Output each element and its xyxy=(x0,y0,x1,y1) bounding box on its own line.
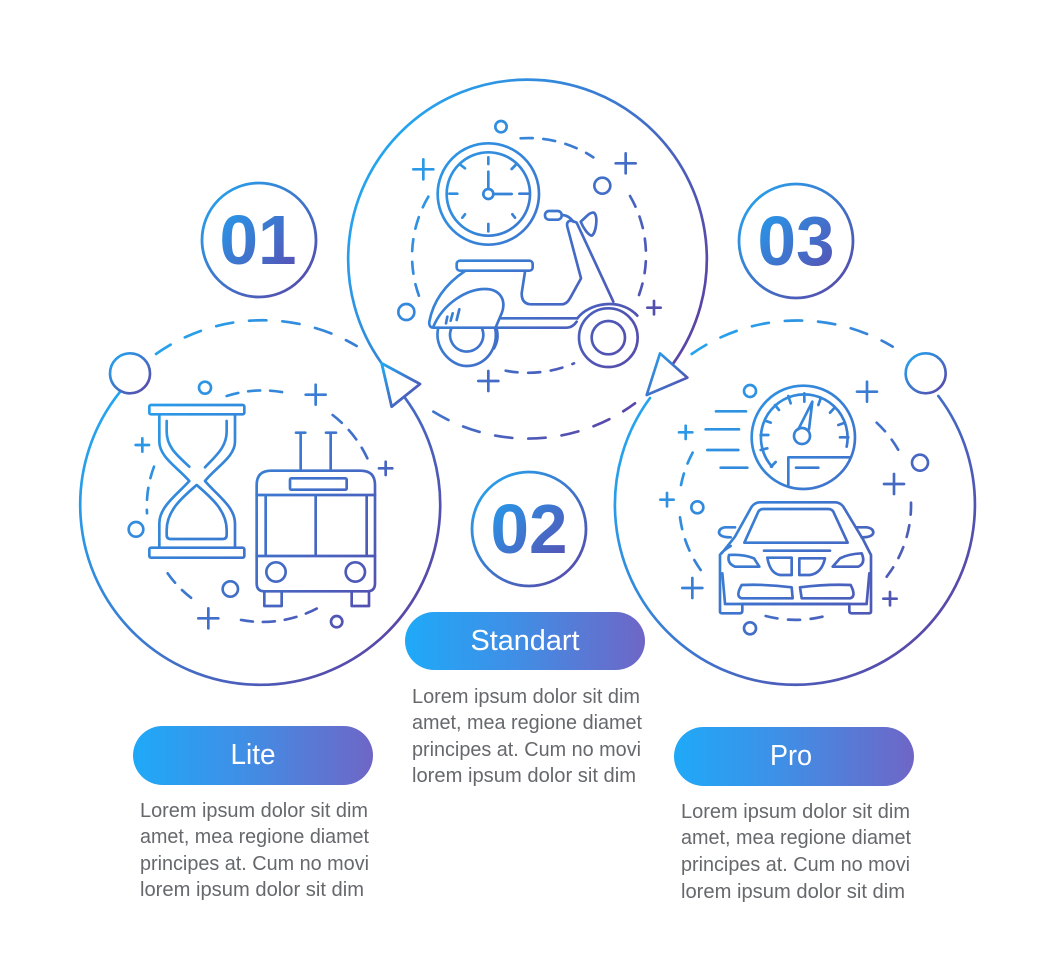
text block: standart: amet, mea regione diamet xyxy=(412,711,642,734)
pill: standart xyxy=(405,612,645,670)
dashed orbit arc xyxy=(692,321,893,354)
icon: trolleybus xyxy=(257,433,375,606)
pill: standart: Standart xyxy=(470,625,580,657)
pill: lite: Lite xyxy=(230,739,276,771)
number badge 01 xyxy=(202,183,316,297)
ring with gap xyxy=(80,392,440,685)
number badge 02 xyxy=(472,472,586,586)
text block: standart: lorem ipsum dolor sit dim xyxy=(412,764,636,787)
text block: lite: Lorem ipsum dolor sit dim xyxy=(140,799,368,822)
inner dashes xyxy=(680,423,911,620)
icon: car xyxy=(719,502,873,613)
pill: lite xyxy=(133,726,373,785)
panel: lite circle xyxy=(80,320,440,685)
icon: clock xyxy=(438,143,539,245)
text block: pro: principes at. Cum no movi xyxy=(681,853,910,876)
decorative circles and plus signs xyxy=(398,121,661,391)
panel: pro circle xyxy=(615,321,975,685)
text block: standart xyxy=(412,685,642,787)
decorative circles and plus signs xyxy=(660,382,928,634)
text block: pro: amet, mea regione diamet xyxy=(681,826,911,849)
pill: pro xyxy=(674,727,914,786)
arrow triangle xyxy=(382,363,420,407)
number badge 02: 02 xyxy=(490,490,568,568)
text block: lite: lorem ipsum dolor sit dim xyxy=(140,878,364,901)
text block: lite: amet, mea regione diamet xyxy=(140,825,369,848)
left arrow triangle xyxy=(382,363,420,407)
small node circle xyxy=(906,353,946,393)
panel: standart circle xyxy=(348,80,707,439)
pill: pro: Pro xyxy=(770,740,812,772)
dashed orbit arc xyxy=(156,320,357,354)
small node circle xyxy=(110,353,150,393)
text block: pro: Lorem ipsum dolor sit dim xyxy=(681,800,910,823)
number badge 03: 03 xyxy=(758,202,834,280)
ring with gap xyxy=(348,80,707,363)
text block: standart: principes at. Cum no movi xyxy=(412,738,641,761)
inner dashes xyxy=(412,138,646,373)
arrow triangle xyxy=(647,353,687,395)
icon: scooter xyxy=(429,211,638,367)
text block: lite xyxy=(140,799,369,901)
text block: pro xyxy=(681,800,911,903)
dashed orbit arc xyxy=(433,403,635,439)
inner dashes xyxy=(147,390,367,622)
ring with gap xyxy=(615,396,975,685)
icon: speedometer xyxy=(706,386,855,489)
number badge 01: 01 xyxy=(220,201,296,279)
number badge 03 xyxy=(739,184,853,298)
text block: lite: principes at. Cum no movi xyxy=(140,852,369,875)
icon: hourglass xyxy=(149,405,244,558)
text block: pro: lorem ipsum dolor sit dim xyxy=(681,880,905,903)
decorative circles and plus signs xyxy=(129,382,392,628)
text block: standart: Lorem ipsum dolor sit dim xyxy=(412,685,640,708)
